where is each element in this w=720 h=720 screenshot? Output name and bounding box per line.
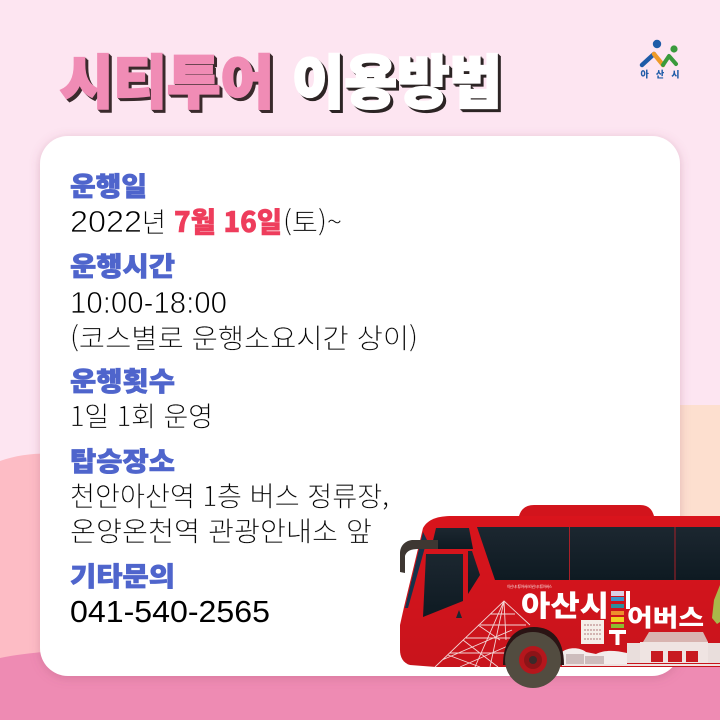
section: operating date: 2022 — [70, 204, 142, 239]
section: operating date: 7월 16일 — [174, 201, 282, 241]
front windows — [405, 528, 480, 618]
section: boarding place — [70, 440, 389, 549]
title: white part: 이용방법 — [292, 36, 502, 120]
pyramid graphic — [435, 601, 530, 667]
section: inquiries — [70, 555, 270, 629]
section: operating date: (토)~ — [283, 200, 342, 240]
colour bar letters — [609, 591, 630, 645]
section: operating date — [70, 165, 342, 241]
section: operating date: 운행일 — [70, 165, 147, 204]
title: pink part: 시티투어 — [62, 38, 276, 122]
title — [60, 36, 505, 123]
section: boarding place: 탑승장소 — [70, 440, 175, 479]
icon: Asan city logo — [640, 40, 680, 80]
panel: info card — [40, 136, 680, 676]
section: operating hours: 10:00-18:00 — [70, 285, 227, 320]
section: operating date: 년 — [142, 200, 166, 240]
green map mark — [712, 585, 720, 624]
title: white part: 이용방법 — [293, 37, 503, 121]
section: boarding place: 천안아산역 1층 버스 정류장, — [70, 474, 389, 514]
front wheel — [503, 627, 564, 688]
bus lettering: 어버스 — [627, 598, 704, 633]
section: frequency: 1일 1회 운영 — [70, 394, 213, 434]
bus lettering: 아산시 — [521, 583, 609, 625]
bus lettering: 아산시티투어버스 아산시티투어버스 — [507, 583, 552, 589]
section: inquiries: 041-540-2565 — [70, 594, 270, 629]
title: white part: 이용방법 — [294, 38, 504, 122]
illustration: red city tour bus — [400, 505, 720, 688]
section: frequency: 운행횟수 — [70, 360, 175, 399]
title: white part: 이용방법 — [295, 39, 505, 123]
section: boarding place: 온양온천역 관광안내소 앞 — [70, 509, 372, 549]
bus roof hump — [519, 505, 654, 516]
icon: Asan city logo: 아산시 — [640, 68, 680, 80]
temple and village — [562, 632, 720, 666]
title: pink part: 시티투어 — [63, 39, 277, 123]
section: inquiries: 기타문의 — [70, 555, 175, 594]
title: pink part: 시티투어 — [61, 37, 275, 121]
section: frequency — [70, 360, 213, 434]
mirror — [400, 540, 438, 573]
section: operating hours — [70, 245, 418, 356]
side windows — [477, 527, 720, 580]
section: operating hours: (코스별로 운행소요시간 상이) — [70, 316, 418, 356]
section: operating hours: 운행시간 — [70, 245, 175, 284]
bus body — [400, 516, 720, 667]
title: pink part: 시티투어 — [60, 36, 274, 120]
bus lettering — [507, 583, 704, 645]
white sign — [581, 620, 604, 644]
